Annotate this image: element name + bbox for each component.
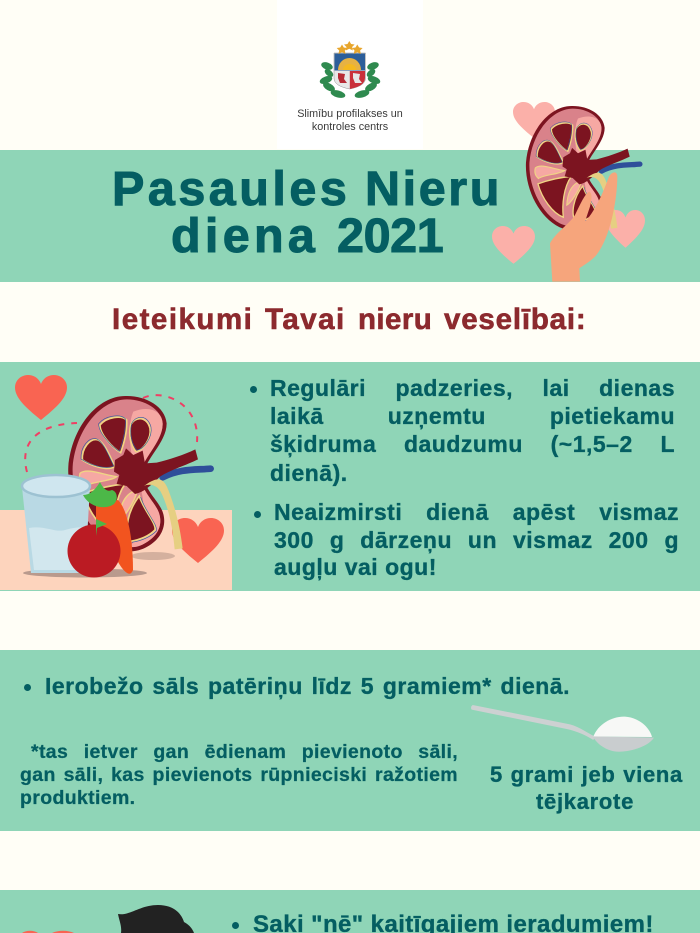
- footnote: [20, 741, 458, 809]
- footnote: produktiem.: [20, 787, 135, 809]
- spoon caption: tējkarote: [536, 789, 634, 814]
- bullet list: water and vegetables: 300 g dārzeņu un vismaz 200 g: [274, 527, 679, 553]
- panel: salt: [0, 650, 700, 831]
- icon: coat of arms: [320, 41, 380, 98]
- heading: Tavai: [265, 303, 346, 336]
- title band: [0, 150, 700, 282]
- bullet list: water and vegetables: Neaizmirsti dienā apēst vismaz: [274, 499, 679, 525]
- footnote: *tas ietver gan ēdienam pievienoto sāli,: [31, 741, 458, 763]
- panel: water and vegetables: [0, 362, 700, 591]
- heading: nieru: [358, 303, 432, 336]
- heading: Ieteikumi: [112, 303, 253, 336]
- footnote: gan sāli, kas pievienots rūpnieciski ražotiem: [20, 764, 458, 786]
- title: Nieru: [365, 162, 502, 216]
- logo panel: [277, 0, 423, 149]
- bullet list: water and vegetables: dienā).: [270, 460, 348, 486]
- logo text: kontroles centrs: [312, 120, 388, 132]
- heading: veselībai:: [444, 303, 586, 336]
- title: diena: [171, 209, 319, 263]
- title: 2021: [337, 209, 443, 263]
- bullet list: water and vegetables: laikā uzņemtu pietiekamu: [270, 403, 675, 429]
- bullet list: water and vegetables: [250, 375, 679, 580]
- spoon caption: [490, 762, 683, 814]
- bullet list: water and vegetables: augļu vai ogu!: [274, 554, 437, 580]
- bullet list: water and vegetables: Regulāri padzeries, lai dienas: [270, 375, 675, 401]
- logo text: [297, 108, 403, 132]
- salt limit text: Ierobežo sāls patēriņu līdz 5 gramiem* dienā.: [45, 673, 570, 699]
- title: Pasaules: [112, 162, 350, 216]
- panel: harmful habits: [0, 890, 700, 933]
- bullet list: water and vegetables: šķidruma daudzumu (~1,5–2 L: [270, 431, 675, 457]
- spoon caption: 5 grami jeb viena: [490, 762, 683, 786]
- heading: [112, 303, 586, 336]
- logo text: Slimību profilakses un: [297, 108, 403, 120]
- title: [112, 162, 502, 263]
